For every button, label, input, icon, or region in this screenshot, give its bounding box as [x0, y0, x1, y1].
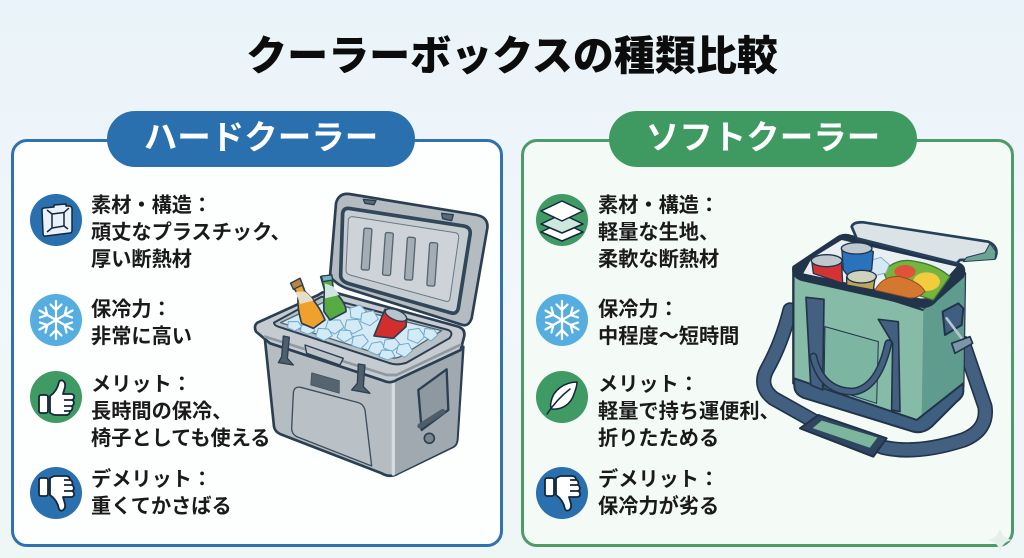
text: soft merit: 折りたためる: [598, 428, 719, 450]
text: soft cooling: [598, 298, 739, 348]
icon: thumbs down soft: [536, 467, 588, 519]
text: hard material: [91, 194, 291, 271]
text: hard demerit: 重くてかさばる: [91, 496, 232, 518]
heading: soft cooler: [609, 111, 917, 167]
text: hard merit: 長時間の保冷、: [91, 401, 232, 423]
text: hard material: 頑丈なプラスチック、: [91, 222, 291, 244]
text: soft material: [598, 194, 719, 271]
title: クーラーボックスの種類比較: [246, 33, 778, 79]
text: soft merit: メリット：: [598, 374, 699, 396]
text: soft demerit: 保冷力が劣る: [598, 496, 719, 518]
rim: [255, 291, 464, 382]
icon: thumbs down hard: [30, 467, 82, 519]
text: soft demerit: [598, 468, 719, 518]
text: hard cooling: [91, 298, 192, 348]
shoulder strap: [764, 310, 985, 457]
icon: snowflake soft: [536, 294, 588, 346]
panel: hard cooler: [11, 139, 503, 547]
body: [265, 340, 463, 476]
text: soft merit: [598, 374, 780, 450]
latches: [278, 336, 370, 393]
text: hard merit: [91, 374, 270, 450]
text: soft material: 素材・構造：: [598, 195, 719, 217]
text: hard merit: メリット：: [91, 374, 192, 396]
text: soft cooling: 保冷力：: [598, 299, 679, 321]
text: hard cooling: 保冷力：: [91, 299, 172, 321]
illustration: soft cooler: [764, 222, 996, 457]
icon: material block: [30, 194, 82, 246]
icon: feather: [536, 371, 588, 423]
text: hard material: 素材・構造：: [91, 195, 212, 217]
handles: [806, 297, 900, 412]
panel: soft cooler: [521, 139, 1014, 547]
text: hard demerit: [91, 468, 232, 518]
text: hard cooling: 非常に高い: [91, 326, 192, 348]
watermark sparkle: [988, 528, 1012, 552]
icon: thumbs up: [30, 371, 82, 423]
contents: [811, 243, 950, 300]
opening: [793, 235, 964, 307]
text: soft material: 軽量な生地、: [598, 222, 719, 244]
text: soft cooling: 中程度～短時間: [598, 326, 739, 348]
bag body: [793, 268, 965, 432]
heading: hard cooler: [107, 111, 415, 167]
text: soft material: 柔軟な断熱材: [598, 249, 719, 271]
opened flap: [852, 222, 996, 263]
text: hard demerit: デメリット：: [91, 469, 212, 491]
icon: snowflake hard: [30, 294, 82, 346]
ice: [288, 305, 438, 360]
text: hard merit: 椅子としても使える: [91, 428, 270, 450]
lid: [330, 194, 487, 325]
side buckle: [943, 303, 973, 353]
text: hard material: 厚い断熱材: [91, 249, 192, 271]
heading: hard cooler: ハードクーラー: [144, 120, 378, 157]
text: soft demerit: デメリット：: [598, 469, 719, 491]
bottles and can: [291, 275, 408, 338]
icon: layers: [536, 194, 588, 246]
illustration: hard cooler: [255, 194, 487, 476]
heading: soft cooler: ソフトクーラー: [646, 120, 880, 157]
text: soft merit: 軽量で持ち運便利、: [598, 401, 780, 423]
